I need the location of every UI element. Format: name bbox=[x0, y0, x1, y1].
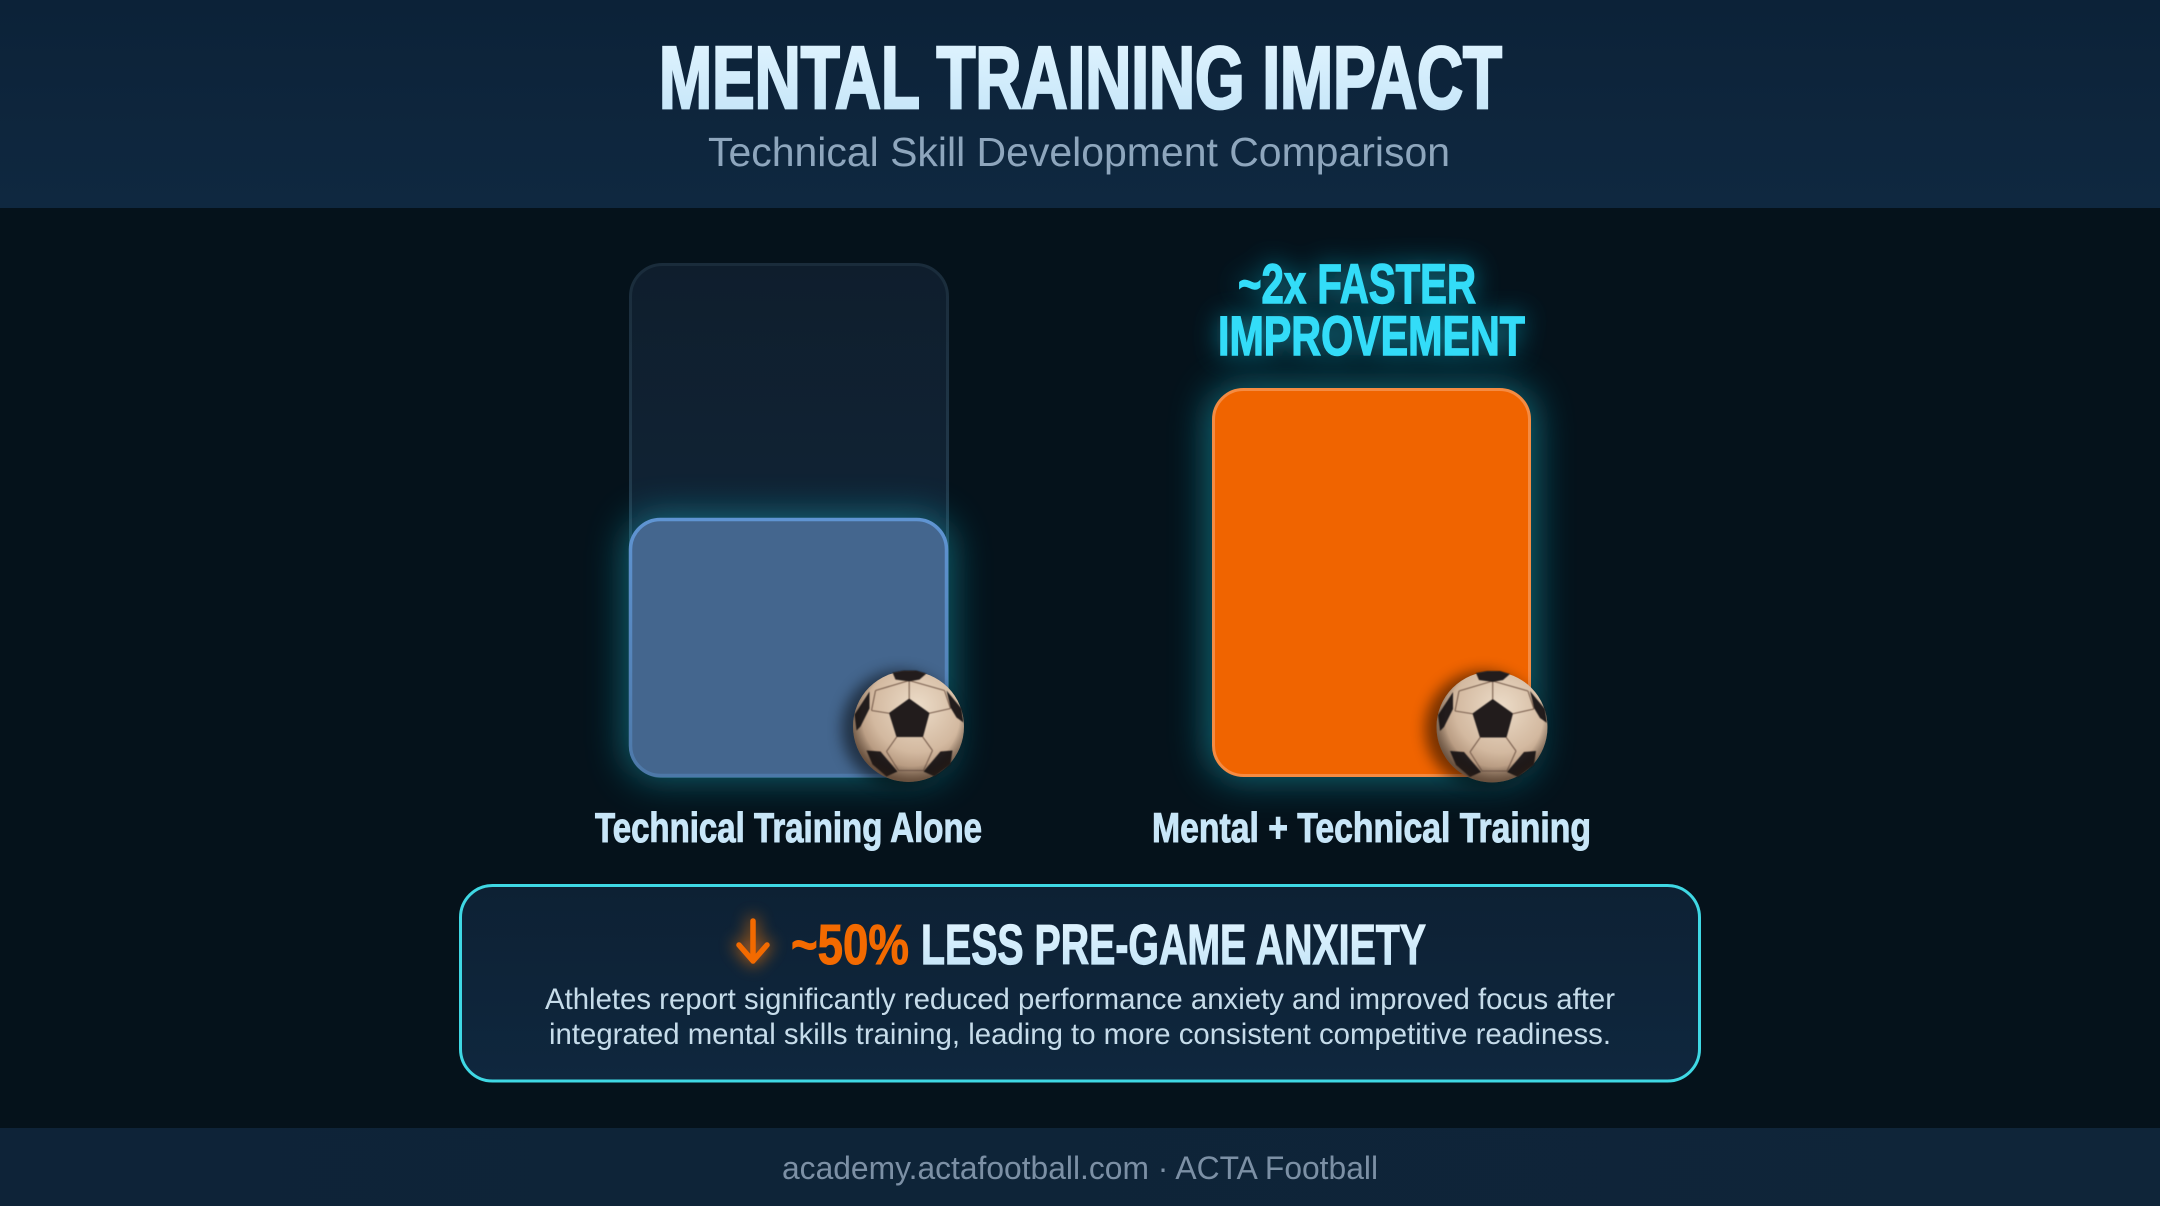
bar track bbox=[630, 264, 948, 776]
subtitle: Technical Skill Development Comparison bbox=[708, 129, 1450, 175]
callout: 2x faster improvement: IMPROVEMENT bbox=[1218, 304, 1525, 367]
panel: anxiety callout bbox=[460, 886, 1700, 1081]
stat: 50 percent: ~50% bbox=[791, 913, 909, 977]
bar: mental + technical training bbox=[1208, 386, 1548, 787]
callout: 2x faster improvement: ~2x FASTER bbox=[1238, 252, 1476, 315]
icon: soccer ball bbox=[842, 670, 964, 786]
body text: Athletes report significantly reduced performance anxiety and improved focus after bbox=[545, 983, 1615, 1016]
bar glow bbox=[625, 516, 952, 779]
title: MENTAL TRAINING IMPACT bbox=[659, 28, 1502, 127]
bar glow bbox=[1208, 386, 1535, 779]
callout: 2x faster improvement bbox=[1218, 252, 1525, 367]
footer band bbox=[0, 1128, 2160, 1206]
body text bbox=[545, 983, 1615, 1051]
body text: integrated mental skills training, leading to more consistent competitive readiness. bbox=[549, 1018, 1611, 1051]
callout: 2x faster improvement: ~2x FASTER bbox=[1238, 252, 1476, 315]
heading: less pre-game anxiety: LESS PRE-GAME ANXIETY bbox=[921, 913, 1426, 977]
icon: soccer ball bbox=[1425, 671, 1548, 787]
bar fill bbox=[630, 520, 946, 776]
header band bbox=[0, 0, 2160, 208]
callout: 2x faster improvement: IMPROVEMENT bbox=[1218, 304, 1525, 367]
bar fill bbox=[1214, 390, 1530, 776]
bar label: technical training alone: Technical Training Alone bbox=[595, 804, 982, 851]
footer text: academy.actafootball.com · ACTA Football bbox=[782, 1150, 1378, 1186]
bar label: mental + technical training: Mental + Technical Training bbox=[1152, 804, 1591, 851]
icon: down arrow bbox=[739, 921, 767, 961]
bar: technical training alone bbox=[625, 264, 964, 786]
